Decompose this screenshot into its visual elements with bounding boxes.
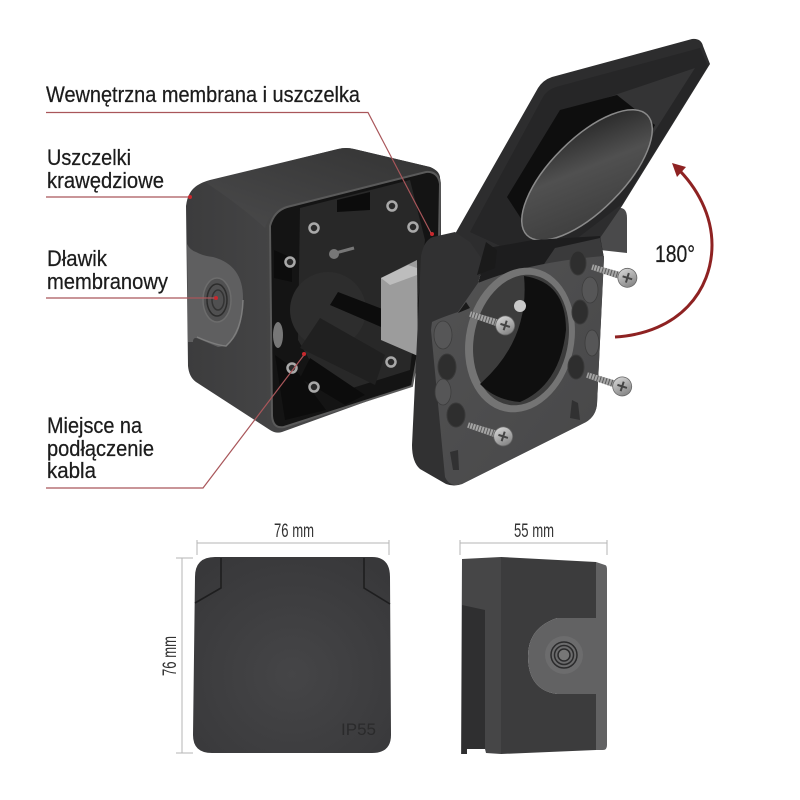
side gland — [545, 636, 583, 674]
dimension: front height — [160, 558, 193, 753]
box back wall — [298, 180, 425, 395]
lid round seal — [501, 89, 673, 261]
callout: edge seals: krawędziowe — [47, 168, 164, 193]
callout: inner membrane and seal — [46, 82, 434, 236]
cover corner flaps — [195, 558, 390, 604]
callout: edge seals — [46, 145, 192, 199]
screw right lower — [584, 366, 634, 398]
socket ring — [452, 257, 588, 423]
closed cover — [193, 557, 391, 753]
dimension: front width — [197, 521, 389, 555]
callout: membrane gland — [46, 246, 218, 300]
dimension: front height: 76 mm — [160, 636, 181, 676]
keyhole mount — [332, 248, 354, 254]
side body main — [501, 557, 596, 754]
lid inner recess — [507, 95, 655, 243]
callout: membrane gland: membranowy — [47, 269, 168, 294]
callout: membrane gland: Dławik — [47, 246, 108, 271]
hinge recess — [478, 236, 604, 283]
side gland panel — [187, 244, 243, 347]
rear flap of plate — [595, 208, 627, 253]
callout: inner membrane and seal: Wewnętrzna membrana i uszczelka — [46, 82, 361, 107]
lid outer edge — [455, 39, 710, 275]
plate clips — [450, 400, 580, 470]
plate body — [412, 232, 604, 486]
socket front plate — [412, 232, 604, 486]
membrane gland — [203, 278, 231, 322]
earth pin — [514, 300, 526, 312]
front view with dimensions — [160, 521, 391, 753]
side lighter lip — [528, 562, 607, 750]
callout: cable connection point — [46, 352, 306, 488]
dimension: depth: 55 mm — [514, 521, 554, 542]
lid inner floor — [600, 68, 695, 170]
screw top right — [589, 258, 639, 290]
hinged lid — [455, 39, 710, 275]
box top face — [205, 148, 440, 228]
angle label: 180° — [655, 241, 695, 268]
rotation arrow 180 degrees — [615, 163, 712, 337]
screw centre — [467, 305, 517, 337]
dimension: depth — [460, 521, 607, 555]
mounting ribs — [274, 192, 390, 405]
plate upper frame — [540, 238, 604, 270]
callout: edge seals: Uszczelki — [47, 145, 131, 170]
callout: cable connection point: Miejsce na — [47, 413, 143, 438]
IP rating mark: IP55 — [341, 720, 376, 739]
side body rear — [461, 557, 501, 754]
socket recess — [461, 266, 581, 414]
socket insert block — [381, 260, 418, 356]
plate fixing holes — [438, 251, 588, 427]
box opening — [270, 172, 440, 427]
plate hinge — [477, 242, 497, 275]
callout: cable connection point: kabla — [47, 458, 97, 483]
plate face — [431, 256, 604, 485]
screw posts — [286, 202, 418, 392]
side view with dimensions — [460, 521, 607, 754]
dimension: front width: 76 mm — [274, 521, 314, 542]
screw bottom — [465, 416, 515, 448]
box body — [186, 148, 441, 433]
callout: cable connection point: podłączenie — [47, 436, 154, 461]
knockout — [273, 322, 283, 348]
open junction box — [186, 148, 441, 433]
knockout circles — [434, 277, 599, 405]
side slot — [462, 605, 485, 754]
